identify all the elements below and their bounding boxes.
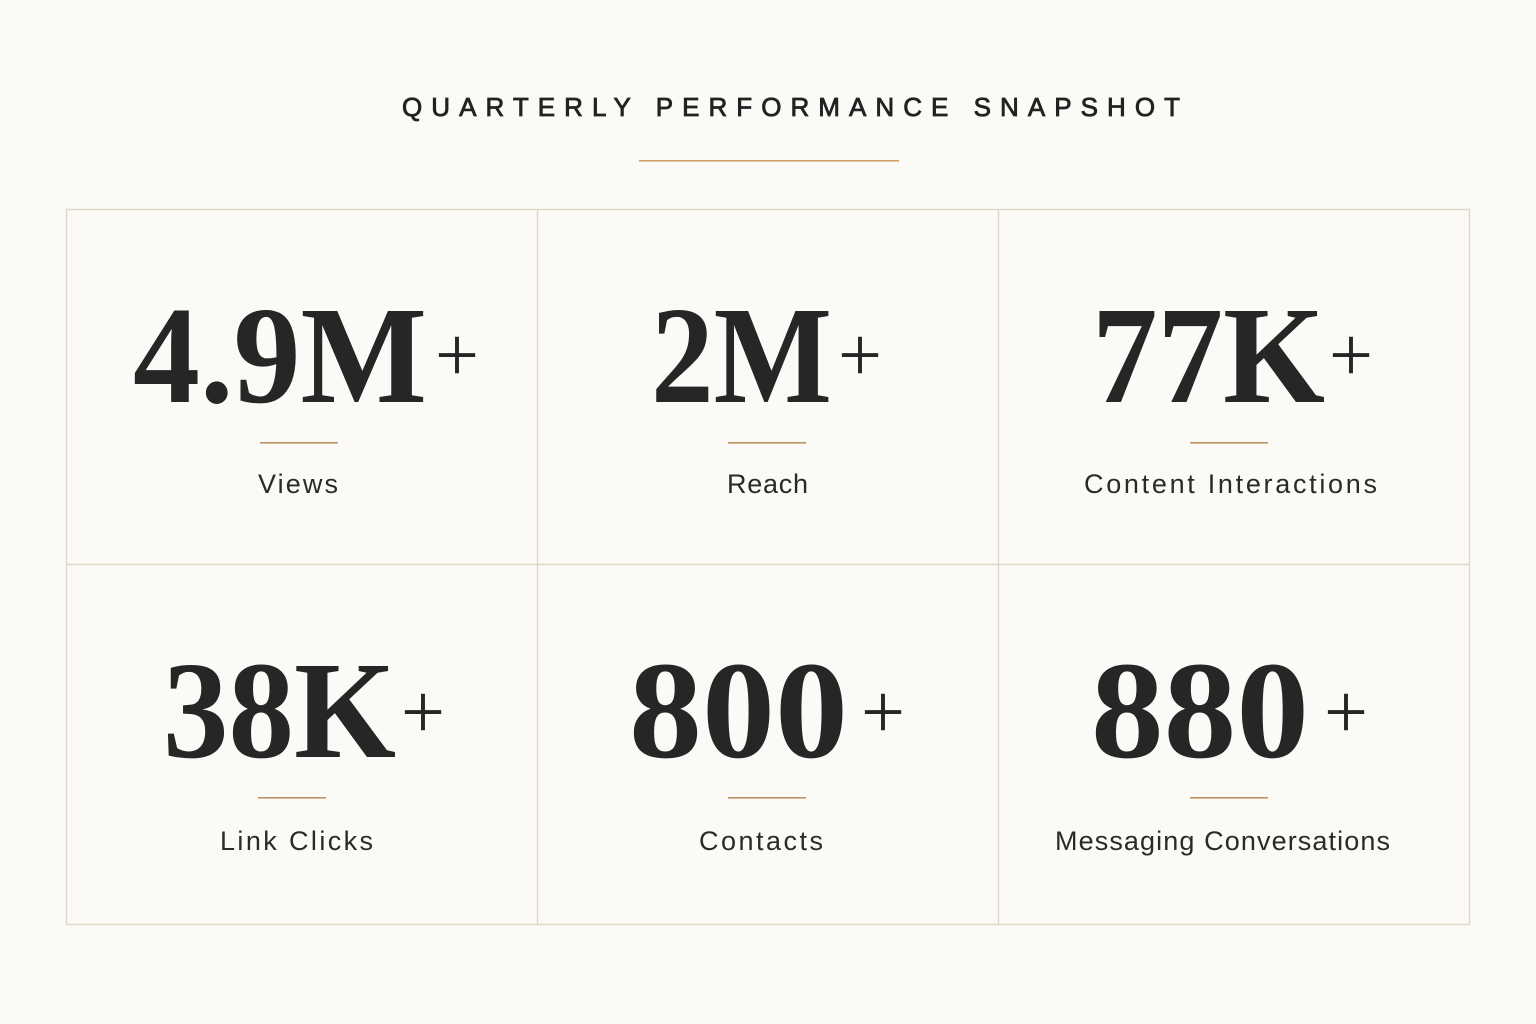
panel: views — [133, 279, 479, 499]
label: link clicks: Link Clicks — [220, 826, 373, 856]
label: views: Views — [258, 469, 338, 499]
number: 880+: + — [1324, 668, 1368, 755]
panel: contacts — [629, 634, 905, 856]
panel: messaging conversations — [1055, 634, 1390, 856]
title: QUARTERLY PERFORMANCE SNAPSHOT — [402, 92, 1180, 122]
label: contacts: Contacts — [699, 826, 823, 856]
number: 2M+: + — [838, 311, 882, 398]
number: 4.9M+: + — [435, 311, 479, 398]
number: 38K+: 38K — [163, 634, 396, 788]
number: 77K+: + — [1329, 311, 1373, 398]
number: 800+: + — [861, 668, 905, 755]
number: 4.9M+: 4.9M — [133, 279, 427, 433]
label: reach: Reach — [727, 469, 808, 499]
number: 77K+: 77K — [1092, 279, 1325, 433]
panel: link clicks — [163, 634, 445, 856]
panel: content interactions — [1084, 279, 1377, 499]
metrics grid frame — [66, 209, 1470, 924]
panel: reach — [651, 279, 882, 499]
number: 2M+: 2M — [651, 279, 832, 433]
number: 800+: 800 — [629, 634, 848, 788]
number: 880+: 880 — [1091, 634, 1309, 788]
label: messaging conversations: Messaging Conversations — [1055, 826, 1390, 856]
number: 38K+: + — [401, 668, 445, 755]
label: content interactions: Content Interactions — [1084, 469, 1377, 499]
